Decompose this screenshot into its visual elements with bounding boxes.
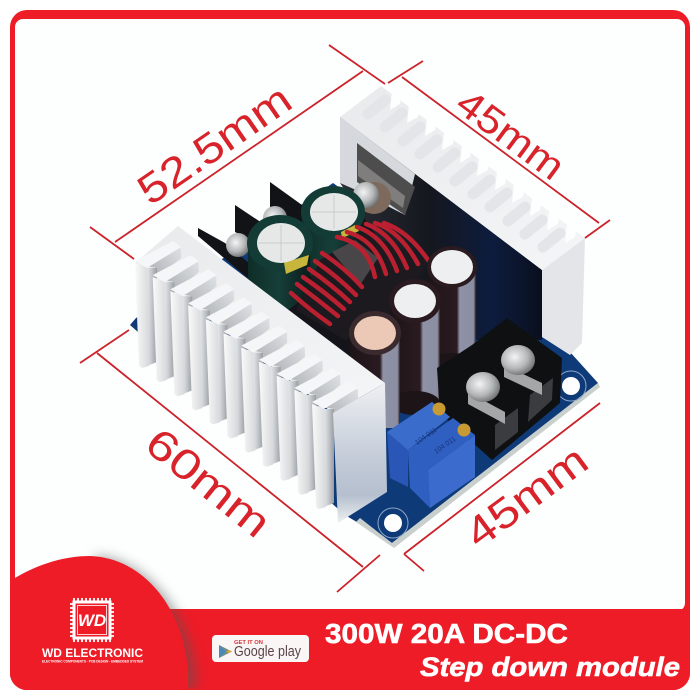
dimension: 45mm bottom [404,403,600,571]
icon: play triangle [219,645,232,658]
toroid inductor [291,223,428,340]
icon: chip: WD [78,611,106,630]
WD Electronic logo [42,598,143,664]
aluminium capacitors [349,246,477,428]
blue trimmer potentiometers: 104 011 [414,427,439,447]
blue trimmer potentiometers [387,402,475,508]
dimension: 45mm top: 45mm [448,81,572,189]
front heatsink [135,226,387,523]
rear heatsink [340,86,585,355]
dimension: 52.5mm [90,45,385,259]
logo wordmark: WD ELECTRONIC [42,646,143,660]
banner title: Step down module [420,652,680,682]
banner title: 300W 20A DC-DC [325,618,568,649]
banner band [10,609,690,690]
Google Play badge [212,635,309,662]
product photo: step down module [130,86,600,548]
green capacitors [247,186,365,318]
circuit board [130,183,600,548]
banner title [325,618,680,682]
logo tagline: ELECTRONIC COMPONENTS - PCB DESIGN - EMBEDDED SYSTEM [42,660,143,664]
Google Play badge: GET IT ON [234,640,263,646]
brand curve with shadow [10,556,196,690]
blue trimmer potentiometers: 104 011 [433,436,458,456]
dimension: 45mm top [388,61,610,238]
front terminal block [437,318,562,460]
Google Play badge: Google play [234,644,302,660]
rear terminal block [198,182,302,280]
dimension: 52.5mm: 52.5mm [129,75,300,214]
dimension: 60mm [80,330,380,592]
dimension: 60mm: 60mm [137,419,280,547]
dimension: 45mm bottom: 45mm [456,436,597,557]
